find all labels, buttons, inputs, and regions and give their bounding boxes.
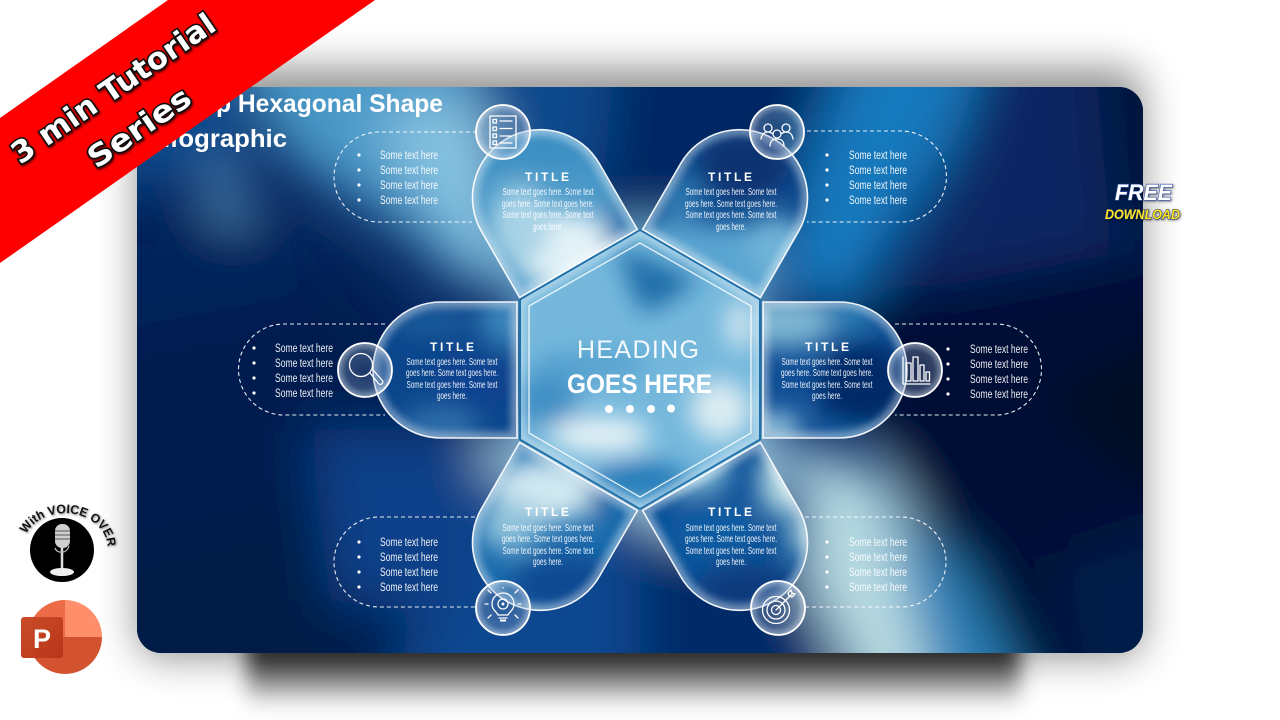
dashed bullet list: bottom left: Some text here xyxy=(380,537,438,549)
panel: bottom right petal xyxy=(642,441,808,612)
icon: magnifier xyxy=(338,343,392,397)
free download badge: FREE xyxy=(1115,180,1173,205)
dashed bullet list: top right: Some text here xyxy=(849,165,907,177)
curved caption: With VOICE OVER xyxy=(18,504,118,548)
top right petal text: goes here. xyxy=(716,222,746,233)
left petal text xyxy=(406,340,498,402)
icon: team xyxy=(750,105,804,159)
icon: checklist xyxy=(476,105,530,159)
hexagon heading: GOES HERE xyxy=(567,369,712,399)
bottom left petal text: TITLE xyxy=(525,505,569,519)
left petal text: Some text goes here. Some text xyxy=(406,357,498,368)
icon: bar chart xyxy=(888,343,942,397)
dashed bullet list: top right xyxy=(807,131,946,222)
dashed bullet list: bottom left xyxy=(334,517,477,607)
bottom right petal text: TITLE xyxy=(708,505,752,519)
presentation title: p Hexagonal Shape xyxy=(216,90,443,118)
ribbon text: 3 min Tutorial xyxy=(5,7,222,172)
dashed bullet list: bottom left: Some text here xyxy=(380,582,438,594)
dashed bullet list: top left: Some text here xyxy=(380,180,438,192)
dashed bullet list: right: Some text here xyxy=(970,344,1028,356)
hexagon heading: HEADING xyxy=(577,336,699,364)
right petal text: Some text goes here. Some text xyxy=(782,380,873,391)
presentation title: Infographic xyxy=(147,125,287,153)
panel: top right petal xyxy=(642,128,808,299)
dashed bullet list: top left: Some text here xyxy=(380,195,438,207)
left petal text: TITLE xyxy=(430,340,474,354)
corner ribbon xyxy=(0,0,375,263)
dashed bullet list: bottom left: Some text here xyxy=(380,552,438,564)
panel: top left petal xyxy=(472,128,638,299)
left petal text: Some text goes here. Some text xyxy=(406,380,498,391)
presentation title xyxy=(147,90,443,153)
panel: bottom left petal xyxy=(472,441,638,612)
right petal text: Some text goes here. Some text xyxy=(782,357,873,368)
dashed bullet list: top left xyxy=(334,132,477,222)
top right petal text: goes here. Some text goes here. xyxy=(685,199,777,210)
bottom left petal text: Some text goes here. Some text xyxy=(502,546,594,557)
bottom left petal text: Some text goes here. Some text xyxy=(502,523,594,534)
top right petal text: Some text goes here. Some text xyxy=(686,210,777,221)
bottom left petal text: goes here. Some text goes here. xyxy=(502,534,594,545)
dashed bullet list: left: Some text here xyxy=(275,373,333,385)
dashed bullet list: left: Some text here xyxy=(275,358,333,370)
icon: PowerPoint logo xyxy=(21,600,102,674)
bottom left petal text: goes here. xyxy=(533,557,563,568)
dashed bullet list: bottom right: Some text here xyxy=(849,552,907,564)
free download badge: DOWNLOAD xyxy=(1105,207,1180,222)
blurred photo background card xyxy=(137,87,1143,653)
icon: PowerPoint logo: P xyxy=(33,624,51,654)
panel: central hexagon xyxy=(510,225,765,515)
bottom right petal text: goes here. xyxy=(716,557,746,568)
top left petal text xyxy=(502,170,594,233)
icon: light bulb xyxy=(476,581,530,635)
dashed bullet list: bottom right: Some text here xyxy=(849,582,907,594)
top left petal text: goes here. Some text goes here. xyxy=(502,199,594,210)
icon: microphone xyxy=(50,524,74,576)
left petal text: goes here. xyxy=(437,391,467,402)
dashed bullet list: left xyxy=(238,324,385,415)
dashed bullet list: right: Some text here xyxy=(970,389,1028,401)
free download badge xyxy=(1105,180,1180,222)
dashed bullet list: bottom right: Some text here xyxy=(849,567,907,579)
voice over badge xyxy=(18,504,118,582)
bottom right petal text: goes here. Some text goes here. xyxy=(685,534,777,545)
dashed bullet list: bottom right xyxy=(805,517,946,607)
dashed bullet list: right xyxy=(895,324,1042,415)
dashed bullet list: top right: Some text here xyxy=(849,180,907,192)
dashed bullet list: bottom right: Some text here xyxy=(849,537,907,549)
hexagon heading xyxy=(567,336,712,399)
card drop shadow xyxy=(137,68,1143,705)
bottom right petal text: Some text goes here. Some text xyxy=(686,523,777,534)
dashed bullet list: top left: Some text here xyxy=(380,165,438,177)
panel: left petal xyxy=(372,301,518,439)
dashed bullet list: top right: Some text here xyxy=(849,195,907,207)
dashed bullet list: top left: Some text here xyxy=(380,150,438,162)
bottom left petal text xyxy=(502,505,594,568)
top left petal text: Some text goes here. Some text xyxy=(502,210,594,221)
dashed bullet list: left: Some text here xyxy=(275,343,333,355)
top right petal text: TITLE xyxy=(708,170,752,184)
panel: right petal xyxy=(762,301,908,439)
right petal text: goes here. xyxy=(812,391,842,402)
dashed bullet list: bottom left: Some text here xyxy=(380,567,438,579)
right petal text: TITLE xyxy=(805,340,849,354)
top left petal text: goes here. xyxy=(533,222,563,233)
dashed bullet list: top right: Some text here xyxy=(849,150,907,162)
left petal text: goes here. Some text goes here. xyxy=(406,368,498,379)
bottom right petal text: Some text goes here. Some text xyxy=(686,546,777,557)
top left petal text: TITLE xyxy=(525,170,569,184)
ribbon text: Series xyxy=(81,80,198,176)
bottom right petal text xyxy=(685,505,777,568)
right petal text: goes here. Some text goes here. xyxy=(781,368,873,379)
top right petal text xyxy=(685,170,777,233)
top right petal text: Some text goes here. Some text xyxy=(686,187,777,198)
dashed bullet list: left: Some text here xyxy=(275,388,333,400)
top left petal text: Some text goes here. Some text xyxy=(502,187,594,198)
dashed bullet list: right: Some text here xyxy=(970,359,1028,371)
hexagon dots xyxy=(605,404,675,413)
right petal text xyxy=(781,340,873,402)
icon: target xyxy=(751,581,805,635)
dashed bullet list: right: Some text here xyxy=(970,374,1028,386)
